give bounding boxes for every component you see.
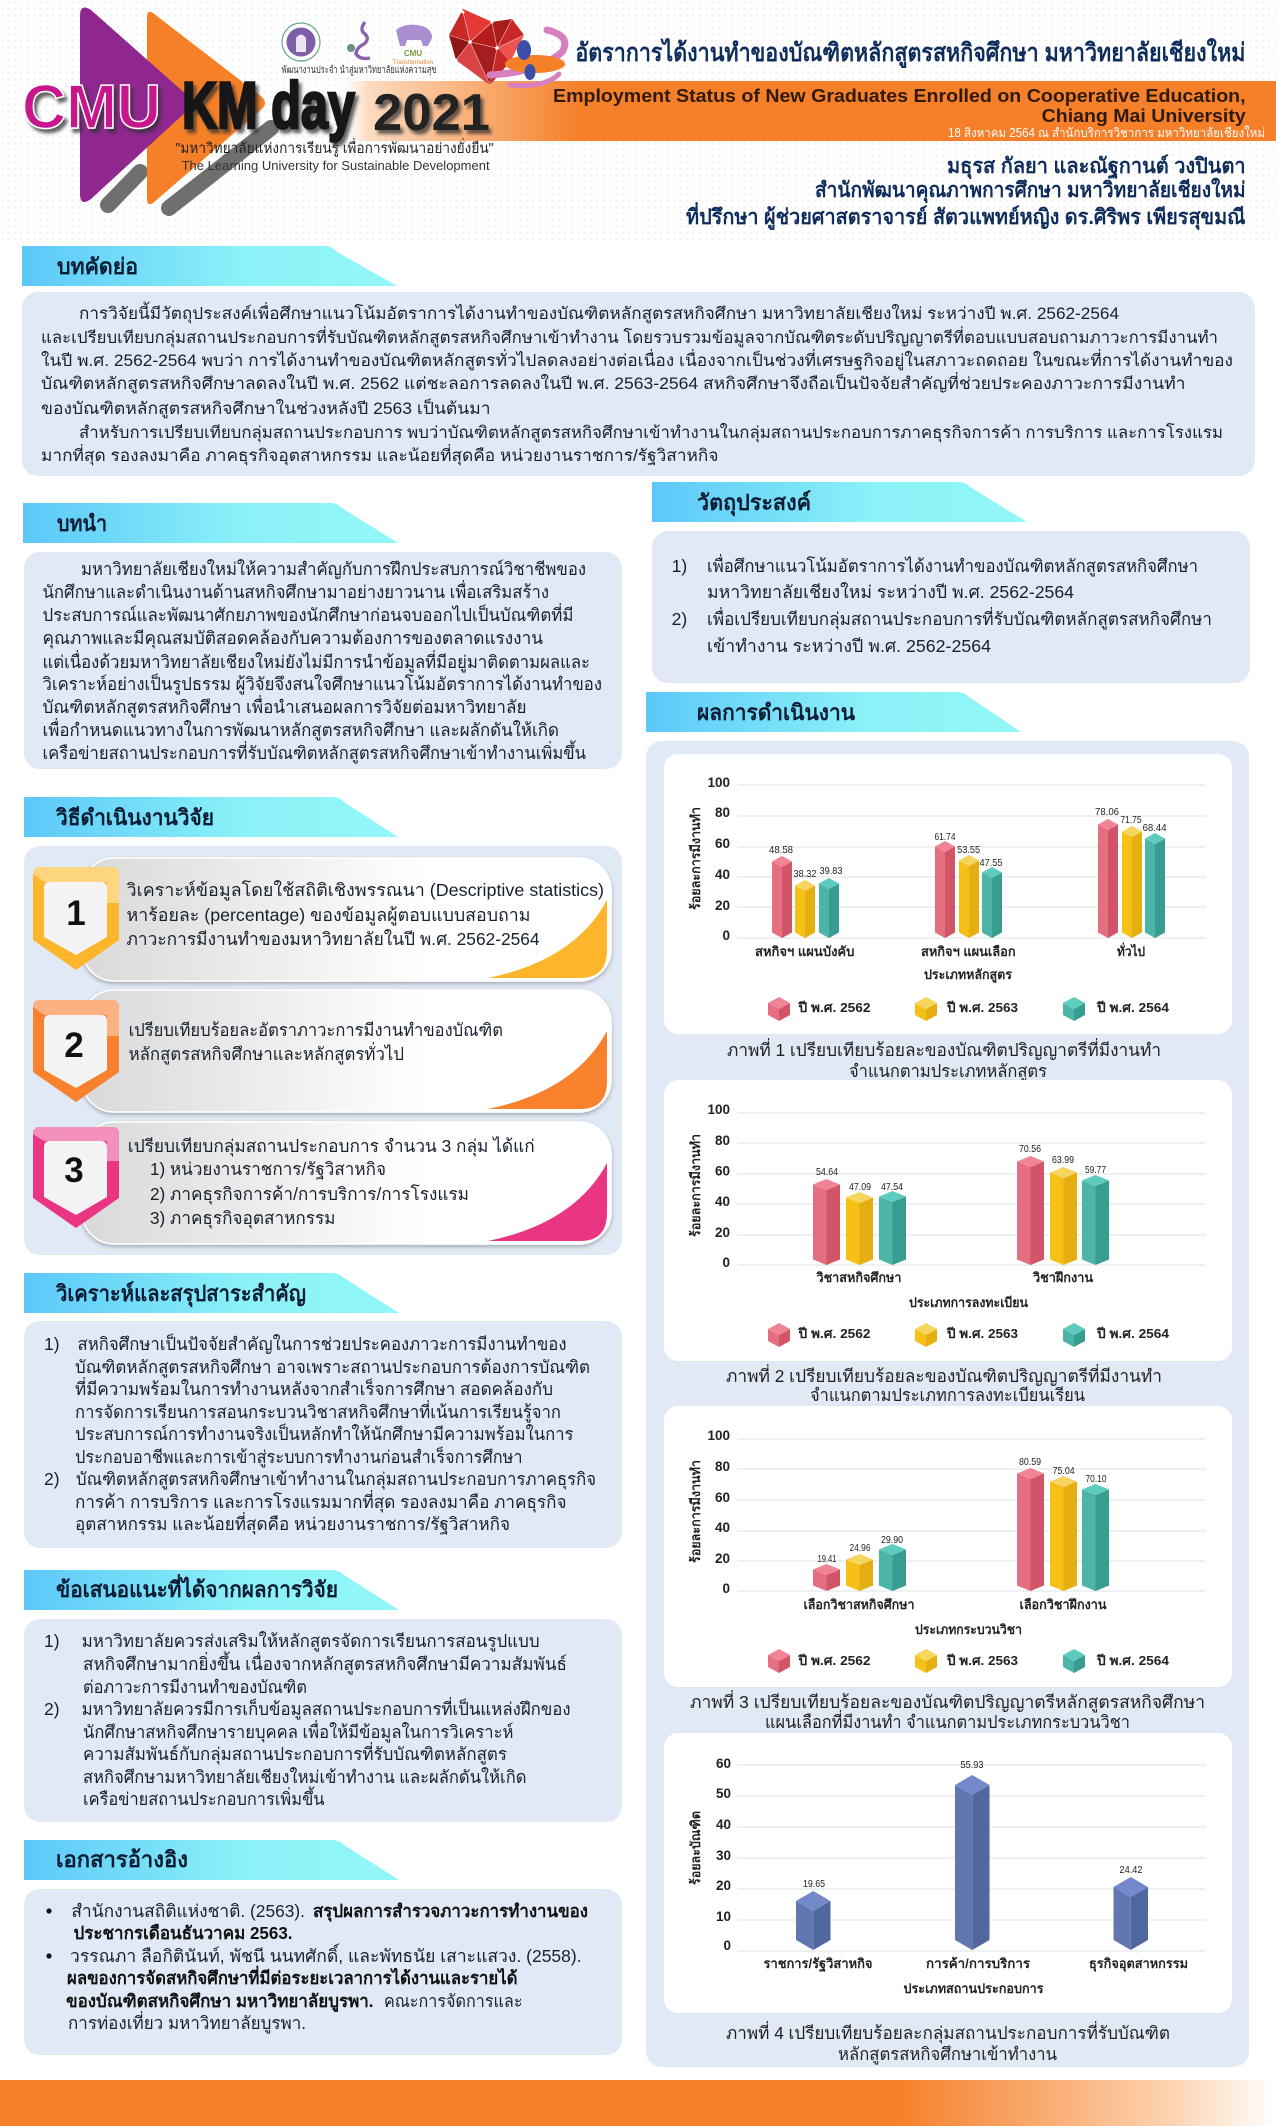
icon: university seal xyxy=(282,23,320,61)
step 3 card: 2) ภาคธุรกิจการค้า/การบริการ/การโรงแรม xyxy=(150,1184,469,1205)
panel: objectives text: เพื่อศึกษาแนวโน้มอัตราการได้งานทำของบัณฑิตหลักสูตรสหกิจศึกษา xyxy=(707,554,1198,577)
icon: CMU Transformation elephant: CMU xyxy=(404,49,422,58)
panel: abstract text: สำหรับการเปรียบเทียบกลุ่มสถานประกอบการ พบว่าบัณฑิตหลักสูตรสหกิจศึกษาเข้าทำงานในกลุ่มสถานประกอบการภาคธุรกิจการค้า การบริการ และการโรงแรม xyxy=(79,423,1223,443)
panel: analysis text: ที่มีความพร้อมในการทำงานหลังจากสำเร็จการศึกษา สอดคล้องกับ xyxy=(75,1377,553,1399)
category labels: ราชการ/รัฐวิสาหกิจ xyxy=(764,1956,872,1973)
panel: introduction text: แต่เนื่องด้วยมหาวิทยาลัยเชียงใหม่ยังไม่มีการนำข้อมูลที่มีอยู่มาติดตามผลและ xyxy=(42,650,590,673)
panel: introduction text: เพื่อกำหนดแนวทางในการพัฒนาหลักสูตรสหกิจศึกษา และผลักดันให้เกิด xyxy=(42,718,559,741)
chart 1: 40 xyxy=(715,867,730,882)
shield 3: 3 xyxy=(64,1151,84,1190)
bars xyxy=(772,819,1165,938)
x axis title: ประเภทการลงทะเบียน xyxy=(909,1295,1028,1310)
chart 1: 60 xyxy=(715,836,730,851)
panel: analysis text: ประกอบอาชีพและการเข้าสู่ระบบการทำงานก่อนสำเร็จการศึกษา xyxy=(75,1446,522,1468)
shield 1: 1 xyxy=(66,894,86,933)
x axis title: ประเภทสถานประกอบการ xyxy=(904,1981,1044,1996)
caption 2: จำแนกตามประเภทการลงทะเบียนเรียน xyxy=(810,1385,1085,1405)
legend: ปี พ.ศ. 2562 xyxy=(797,1326,870,1341)
chart 3: 0 xyxy=(722,1581,730,1596)
caption 2: ภาพที่ 2 เปรียบเทียบร้อยละของบัณฑิตปริญญาตรีที่มีงานทำ xyxy=(726,1364,1162,1386)
legend: ปี พ.ศ. 2564 xyxy=(1096,1000,1170,1015)
panel: recommendations text: มหาวิทยาลัยควรมีการเก็บข้อมูลสถานประกอบการที่เป็นแหล่งฝึกของ xyxy=(82,1697,571,1720)
value labels: 47.55 xyxy=(980,857,1003,869)
value labels: 53.55 xyxy=(957,844,980,856)
chart 2: 40 xyxy=(715,1194,730,1209)
panel: introduction text xyxy=(24,552,622,769)
panel: introduction text: เครือข่ายสถานประกอบการที่รับบัณฑิตหลักสูตรสหกิจศึกษาเข้าทำงานเพิ่มขึ้น xyxy=(42,740,586,764)
heading: abstract: บทคัดย่อ xyxy=(57,254,138,279)
panel: abstract text: การวิจัยนี้มีวัตถุประสงค์เพื่อศึกษาแนวโน้มอัตราการได้งานทำของบัณฑิตหลักสูตรสหกิจศึกษา มหาวิทยาลัยเชียงใหม่ ระหว่างปี พ.ศ. 2562-2564 xyxy=(79,301,1119,324)
chart 2: 20 xyxy=(715,1225,730,1240)
authors: ที่ปรึกษา ผู้ช่วยศาสตราจารย์ สัตวแพทย์หญิง ดร.ศิริพร เพียรสุขมณี xyxy=(686,201,1246,231)
panel: recommendations text: ต่อภาวะการมีงานทำของบัณฑิต xyxy=(83,1677,307,1697)
chart 2: 0 xyxy=(722,1255,730,1270)
authors: มธุรส กัลยา และณัฐกานต์ วงปินตา xyxy=(947,154,1246,180)
value labels: 54.64 xyxy=(816,1166,838,1178)
value labels xyxy=(818,1456,1107,1565)
section: methods xyxy=(24,797,622,1255)
tagline xyxy=(176,138,494,173)
panel: recommendations text: 2) xyxy=(44,1699,60,1719)
heading: methods xyxy=(24,797,398,837)
section: abstract xyxy=(22,246,1255,476)
value labels: 24.96 xyxy=(850,1542,871,1554)
bars xyxy=(796,1775,1148,1950)
panel: recommendations text: นักศึกษาสหกิจศึกษารายบุคคล เพื่อให้มีข้อมูลในการวิเคราะห์ xyxy=(83,1720,514,1743)
panel: abstract text: มากที่สุด รองลงมาคือ ภาคธุรกิจอุตสาหกรรม และน้อยที่สุดคือ หน่วยงานราชการ/รัฐวิสาหกิจ xyxy=(41,444,718,466)
value labels: 38.32 xyxy=(794,868,817,880)
caption 4: หลักสูตรสหกิจศึกษาเข้าทำงาน xyxy=(838,2044,1057,2065)
panel: references text: วรรณภา ลือกิตินันท์, พัชนี นนทศักดิ์, และพัทธนัย เสาะแสวง. (2558). xyxy=(70,1943,582,1966)
heading: analysis xyxy=(24,1273,399,1313)
chart 4: 0 xyxy=(723,1938,731,1953)
legend: ปี พ.ศ. 2563 xyxy=(946,1000,1018,1015)
panel: recommendations text: ความสัมพันธ์กับกลุ่มสถานประกอบการที่รับบัณฑิตหลักสูตร xyxy=(83,1742,507,1765)
panel: abstract text: ของบัณฑิตหลักสูตรสหกิจศึกษาในช่วงหลังปี 2563 เป็นต้นมา xyxy=(41,398,491,419)
heading: methods: วิธีดำเนินงานวิจัย xyxy=(55,805,214,830)
chart 1: 20 xyxy=(715,898,730,913)
heading: objectives: วัตถุประสงค์ xyxy=(697,490,811,517)
panel: analysis text: การจัดการเรียนการสอนกระบวนวิชาสหกิจศึกษาที่เน้นการเรียนรู้จาก xyxy=(75,1400,561,1423)
section: recommendations xyxy=(24,1570,622,1822)
y axis title: ร้อยละบัณฑิต xyxy=(688,1811,703,1885)
icon: low-poly heart xyxy=(449,9,565,86)
chart 4: 40 xyxy=(716,1817,731,1832)
x axis title: ประเภทกระบวนวิชา xyxy=(915,1622,1022,1637)
legend xyxy=(768,997,1170,1021)
category labels: เลือกวิชาสหกิจศึกษา xyxy=(804,1597,914,1612)
heading: results xyxy=(646,692,1021,732)
panel: recommendations text: เครือข่ายสถานประกอบการเพิ่มขึ้น xyxy=(83,1786,325,1809)
value labels: 59.77 xyxy=(1085,1164,1106,1176)
panel: references text: คณะการจัดการและ xyxy=(384,1991,522,2011)
value labels: 55.93 xyxy=(960,1759,984,1771)
category labels: สหกิจฯ แผนเลือก xyxy=(921,944,1016,959)
panel: references text xyxy=(24,1889,622,2055)
step 3 card: เปรียบเทียบกลุ่มสถานประกอบการ จำนวน 3 กลุ่ม ได้แก่ xyxy=(128,1136,535,1157)
caption 1: ภาพที่ 1 เปรียบเทียบร้อยละของบัณฑิตปริญญาตรีที่มีงานทำ xyxy=(727,1038,1161,1060)
shield 3 xyxy=(33,1127,119,1228)
bars xyxy=(813,1468,1109,1591)
caption 2 xyxy=(726,1364,1162,1405)
section: introduction xyxy=(23,503,622,769)
header banner xyxy=(22,8,1276,231)
category labels: การค้า/การบริการ xyxy=(926,1956,1030,1971)
panel: analysis text: บัณฑิตหลักสูตรสหกิจศึกษา อาจเพราะสถานประกอบการต้องการบัณฑิต xyxy=(75,1357,590,1378)
panel: introduction text: วิเคราะห์อย่างเป็นรูปธรรม ผู้วิจัยจึงสนใจศึกษาแนวโน้มอัตราการได้งานทำของ xyxy=(42,673,602,695)
chart 2: 100 xyxy=(707,1102,730,1117)
caption 3: แผนเลือกที่มีงานทำ จำแนกตามประเภทกระบวนวิชา xyxy=(765,1710,1130,1732)
value labels: 19.41 xyxy=(818,1553,837,1565)
title English: Employment Status of New Graduates Enrolled on Cooperative Education, xyxy=(553,85,1246,106)
value labels xyxy=(803,1759,1143,1890)
panel: analysis text: 1) xyxy=(44,1334,60,1354)
tagline: The Learning University for Sustainable Development xyxy=(182,158,490,173)
value labels: 75.04 xyxy=(1053,1465,1075,1477)
category labels xyxy=(804,1597,1107,1612)
panel: introduction text: คุณภาพและมีคุณสมบัติสอดคล้องกับความต้องการของตลาดแรงงาน xyxy=(42,628,543,649)
orange title band xyxy=(340,81,1276,141)
y axis title: ร้อยละการมีงานทำ xyxy=(688,807,703,910)
legend xyxy=(768,1323,1170,1347)
panel: objectives text: เข้าทำงาน ระหว่างปี พ.ศ. 2562-2564 xyxy=(707,636,991,656)
panel: results xyxy=(646,741,1249,2067)
heading: analysis: วิเคราะห์และสรุปสาระสำคัญ xyxy=(55,1281,306,1308)
authors xyxy=(686,154,1246,231)
step 1 card xyxy=(33,858,611,981)
logo: CMU KM day 2021 wordmark: 2021 xyxy=(373,84,490,142)
y axis title: ร้อยละการมีงานทำ xyxy=(688,1460,703,1563)
chart 2: 60 xyxy=(715,1164,730,1178)
category labels xyxy=(755,942,1145,959)
panel: introduction text: มหาวิทยาลัยเชียงใหม่ให้ความสำคัญกับการฝึกประสบการณ์วิชาชีพของ xyxy=(81,559,586,579)
chart 4: 60 xyxy=(716,1756,731,1771)
value labels: 70.56 xyxy=(1019,1143,1041,1155)
category labels: สหกิจฯ แผนบังคับ xyxy=(755,944,854,959)
icon: CMU Transformation elephant: Transformation xyxy=(393,60,433,66)
category labels: วิชาฝึกงาน xyxy=(1032,1270,1093,1285)
chart 1: 80 xyxy=(715,805,730,820)
step 1 card: วิเคราะห์ข้อมูลโดยใช้สถิติเชิงพรรณนา (Descriptive statistics) xyxy=(126,880,604,901)
legend xyxy=(768,1649,1170,1673)
panel: methods xyxy=(24,846,622,1255)
heading: results: ผลการดำเนินงาน xyxy=(697,700,855,725)
legend: ปี พ.ศ. 2562 xyxy=(797,1653,870,1668)
panel: analysis text: สหกิจศึกษาเป็นปัจจัยสำคัญในการช่วยประคองภาวะการมีงานทำของ xyxy=(78,1333,566,1354)
panel: recommendations text: 1) xyxy=(44,1631,60,1651)
chart 1: 0 xyxy=(722,928,730,943)
value labels: 68.44 xyxy=(1143,822,1167,834)
panel: analysis text: บัณฑิตหลักสูตรสหกิจศึกษาเข้าทำงานในกลุ่มสถานประกอบการภาคธุรกิจ xyxy=(76,1469,596,1490)
panel: analysis text: การค้า การบริการ และการโรงแรมมากที่สุด รองลงมาคือ ภาคธุรกิจ xyxy=(75,1490,566,1513)
heading: recommendations: ข้อเสนอแนะที่ได้จากผลการวิจัย xyxy=(56,1573,338,1602)
panel: references text: ของบัณฑิตสหกิจศึกษา มหาวิทยาลัยบูรพา. xyxy=(66,1991,374,2013)
panel: introduction text: ประสบการณ์และพัฒนาศักยภาพของนักศึกษาก่อนจบออกไปเป็นบัณฑิตที่มี xyxy=(42,603,574,625)
step 2 card: เปรียบเทียบร้อยละอัตราภาวะการมีงานทำของบัณฑิต xyxy=(129,1020,503,1040)
value labels: 39.83 xyxy=(820,865,843,877)
panel: analysis text: ประสบการณ์การทำงานจริงเป็นหลักทำให้นักศึกษามีความพร้อมในการ xyxy=(75,1423,574,1444)
panel: references text: ประชากรเดือนธันวาคม 2563. xyxy=(74,1923,292,1943)
value labels: 29.90 xyxy=(881,1534,903,1546)
chart 2 xyxy=(664,1080,1232,1361)
step 2 card: หลักสูตรสหกิจศึกษาและหลักสูตรทั่วไป xyxy=(129,1042,404,1065)
chart 4: 50 xyxy=(716,1786,731,1801)
heading: introduction xyxy=(23,503,398,543)
heading: objectives xyxy=(652,482,1027,522)
legend: ปี พ.ศ. 2562 xyxy=(797,1000,870,1015)
y axis title: ร้อยละการมีงานทำ xyxy=(688,1134,703,1237)
panel: introduction text: บัณฑิตหลักสูตรสหกิจศึกษา เพื่อนำเสนอผลการวิจัยต่อมหาวิทยาลัย xyxy=(42,695,526,718)
panel: introduction text: นักศึกษาและดำเนินงานด้านสหกิจศึกษามาอย่างยาวนาน เพื่อเสริมสร้าง xyxy=(42,580,549,602)
step 3 card xyxy=(33,1122,611,1244)
chart 1: 100 xyxy=(707,775,730,790)
value labels: 80.59 xyxy=(1019,1456,1041,1468)
value labels: 71.75 xyxy=(1120,814,1142,826)
chart 3: 20 xyxy=(715,1551,730,1566)
legend: ปี พ.ศ. 2564 xyxy=(1096,1326,1170,1341)
category labels: ธุรกิจอุตสาหกรรม xyxy=(1089,1956,1188,1972)
category labels: วิชาสหกิจศึกษา xyxy=(816,1270,902,1285)
bars xyxy=(813,1156,1109,1265)
panel: objectives text: มหาวิทยาลัยเชียงใหม่ ระหว่างปี พ.ศ. 2562-2564 xyxy=(707,582,1074,602)
legend: ปี พ.ศ. 2564 xyxy=(1096,1653,1170,1668)
chart 2: 80 xyxy=(715,1133,730,1148)
panel: abstract text: บัณฑิตหลักสูตรสหกิจศึกษาลดลงในปี พ.ศ. 2562 แต่ชะลอการลดลงในปี พ.ศ. 2563-2564 สหกิจศึกษาจึงถือเป็นปัจจัยสำคัญที่ช่วยประคองภาวะการมีงานทำ xyxy=(41,372,1186,394)
value labels: 19.65 xyxy=(803,1878,825,1890)
heading: references: เอกสารอ้างอิง xyxy=(56,1847,188,1872)
panel: references text: สรุปผลการสำรวจภาวะการทำงานของ xyxy=(313,1901,588,1922)
heading: introduction: บทนำ xyxy=(57,511,107,536)
value labels xyxy=(816,1143,1106,1193)
chart 3: 60 xyxy=(715,1490,730,1505)
step 3 card: 3) ภาคธุรกิจอุตสาหกรรม xyxy=(150,1208,336,1229)
panel: objectives text: เพื่อเปรียบเทียบกลุ่มสถานประกอบการที่รับบัณฑิตหลักสูตรสหกิจศึกษา xyxy=(707,607,1212,630)
section: results xyxy=(646,692,1249,2067)
value labels: 24.42 xyxy=(1120,1864,1143,1876)
value labels: 48.58 xyxy=(769,844,793,856)
step 2 card xyxy=(33,990,611,1112)
chart 4: 20 xyxy=(716,1878,731,1893)
panel: recommendations text xyxy=(24,1619,622,1822)
footer band xyxy=(0,2080,1276,2126)
chart 3: 80 xyxy=(715,1459,730,1474)
value labels: 63.99 xyxy=(1052,1154,1074,1166)
category labels: เลือกวิชาฝึกงาน xyxy=(1020,1597,1107,1612)
panel: abstract text xyxy=(22,292,1255,476)
chart 3: 40 xyxy=(715,1520,730,1535)
chart 1 xyxy=(664,754,1232,1034)
heading: abstract xyxy=(22,246,397,286)
section: references xyxy=(24,1840,622,2055)
chart 3: 100 xyxy=(707,1428,730,1443)
logo caption: พัฒนางานประจำ นำสู่มหาวิทยาลัยแห่งความสุข xyxy=(282,65,437,76)
panel: abstract text: ในปี พ.ศ. 2562-2564 พบว่า การได้งานทำของบัณฑิตหลักสูตรทั่วไปลดลงอย่างต่อเนื่อง เนื่องจากเป็นช่วงที่เศรษฐกิจอยู่ในสภาวะถดถอย ในขณะที่การได้งานทำของ xyxy=(41,349,1233,371)
step 3 card: 1) หน่วยงานราชการ/รัฐวิสาหกิจ xyxy=(150,1159,386,1180)
panel: analysis text xyxy=(24,1321,622,1548)
heading: references xyxy=(24,1840,399,1880)
value labels: 47.09 xyxy=(849,1181,871,1193)
panel: recommendations text: มหาวิทยาลัยควรส่งเสริมให้หลักสูตรจัดการเรียนการสอนรูปแบบ xyxy=(82,1631,540,1652)
title English xyxy=(553,85,1246,126)
value labels: 78.06 xyxy=(1095,806,1119,818)
logo: CMU KM day 2021 wordmark: KM day xyxy=(182,68,355,142)
authors: สำนักพัฒนาคุณภาพการศึกษา มหาวิทยาลัยเชียงใหม่ xyxy=(815,177,1246,204)
category labels xyxy=(816,1270,1093,1285)
shield 2: 2 xyxy=(64,1026,84,1065)
panel: analysis text: 2) xyxy=(44,1469,60,1489)
step 1 card: หาร้อยละ (percentage) ของข้อมูลผู้ตอบแบบสอบถาม xyxy=(126,905,530,926)
legend: ปี พ.ศ. 2563 xyxy=(946,1326,1018,1341)
panel: recommendations text: สหกิจศึกษามหาวิทยาลัยเชียงใหม่เข้าทำงาน และผลักดันให้เกิด xyxy=(83,1767,526,1787)
shield 2 xyxy=(33,1000,119,1102)
step 1 card: ภาวะการมีงานทำของมหาวิทยาลัยในปี พ.ศ. 2562-2564 xyxy=(126,929,540,949)
chart 3 xyxy=(664,1406,1232,1687)
category labels: ทั่วไป xyxy=(1117,942,1145,959)
panel: objectives text: 1) xyxy=(672,556,687,576)
shield 1 xyxy=(33,867,119,970)
panel: abstract text: และเปรียบเทียบกลุ่มสถานประกอบการที่รับบัณฑิตหลักสูตรสหกิจศึกษาเข้าทำงาน โดยรวบรวมข้อมูลจากบัณฑิตระดับปริญญาตรีที่ตอบแบบสอบถามภาวะการมีงานทำ xyxy=(41,326,1218,348)
panel: recommendations text: สหกิจศึกษามากยิ่งขึ้น เนื่องจากหลักสูตรสหกิจศึกษามีความสัมพันธ์ xyxy=(83,1651,567,1675)
panel: references text: ผลของการจัดสหกิจศึกษาที่มีต่อระยะเวลาการได้งานและรายได้ xyxy=(67,1965,518,1988)
caption 1 xyxy=(727,1038,1161,1082)
x axis title: ประเภทหลักสูตร xyxy=(924,967,1012,983)
logo: arrow shapes xyxy=(80,8,271,208)
legend: ปี พ.ศ. 2563 xyxy=(946,1653,1018,1668)
chart 4: 10 xyxy=(716,1909,731,1924)
logo: CMU KM day 2021 wordmark: CMU xyxy=(22,73,161,142)
value labels xyxy=(769,806,1167,880)
caption 3: ภาพที่ 3 เปรียบเทียบร้อยละของบัณฑิตปริญญาตรีหลักสูตรสหกิจศึกษา xyxy=(690,1690,1205,1713)
panel: objectives text xyxy=(652,531,1250,683)
section: analysis xyxy=(24,1273,622,1548)
caption 4 xyxy=(726,2021,1170,2065)
title English: Chiang Mai University xyxy=(1042,105,1246,126)
chart 4 xyxy=(664,1733,1232,2013)
panel: references text: การท่องเที่ยว มหาวิทยาลัยบูรพา. xyxy=(68,2011,306,2034)
value labels: 70.10 xyxy=(1086,1473,1107,1485)
panel: references text: สำนักงานสถิติแห่งชาติ. (2563). xyxy=(71,1901,305,1921)
chart 4: 30 xyxy=(716,1848,731,1863)
panel: objectives text: 2) xyxy=(672,609,687,629)
value labels: 61.74 xyxy=(934,831,956,843)
heading: recommendations xyxy=(24,1570,399,1610)
caption 3 xyxy=(690,1690,1205,1732)
category labels xyxy=(764,1956,1188,1973)
logo: CMU KM day 2021 wordmark xyxy=(22,68,490,142)
panel: analysis text: อุตสาหกรรม และน้อยที่สุดคือ หน่วยงานราชการ/รัฐวิสาหกิจ xyxy=(75,1512,510,1535)
icon: ornament xyxy=(347,22,370,58)
icon: CMU Transformation elephant xyxy=(393,25,433,66)
tagline: "มหาวิทยาลัยแห่งการเรียนรู้ เพื่อการพัฒนาอย่างยั่งยืน" xyxy=(176,138,494,157)
caption 1: จำแนกตามประเภทหลักสูตร xyxy=(849,1061,1047,1082)
value labels: 47.54 xyxy=(881,1181,903,1193)
section: objectives xyxy=(652,482,1250,683)
caption 4: ภาพที่ 4 เปรียบเทียบร้อยละกลุ่มสถานประกอบการที่รับบัณฑิต xyxy=(726,2021,1170,2044)
